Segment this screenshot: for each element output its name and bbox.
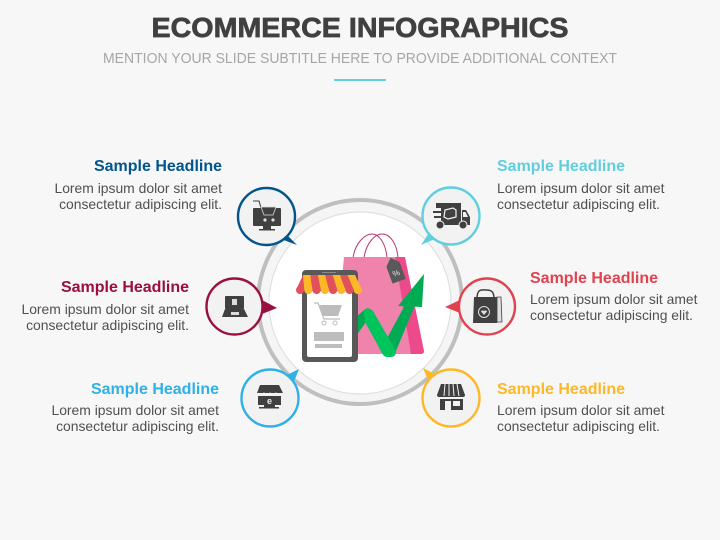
headline: Sample Headline: [497, 158, 625, 175]
text block: Lorem ipsum dolor sit amet: [530, 291, 698, 307]
headline: Sample Headline: [91, 381, 219, 398]
awning: [296, 275, 362, 294]
icon: cart on monitor: [253, 201, 281, 230]
badge: navy: [238, 188, 297, 245]
text block: Lorem ipsum dolor sit amet: [497, 402, 665, 418]
text block: consectetur adipiscing elit.: [497, 196, 660, 212]
item: delivery truck, top right: [421, 158, 665, 245]
icon: shopping bag: [473, 290, 502, 323]
headline: Sample Headline: [497, 381, 625, 398]
item: cart on monitor, top left: [54, 158, 297, 245]
badge: red: [445, 278, 515, 334]
badge: yellow: [422, 368, 480, 426]
phone cart: [314, 303, 342, 325]
text block: consectetur adipiscing elit.: [497, 418, 660, 434]
headline: Sample Headline: [61, 279, 189, 296]
headline: Sample Headline: [94, 158, 222, 175]
text block: consectetur adipiscing elit.: [530, 307, 693, 323]
item: laptop, middle left: [21, 278, 277, 334]
badge: sky blue: [242, 369, 299, 426]
shopping bag: %: [391, 268, 401, 279]
text block: consectetur adipiscing elit.: [56, 418, 219, 434]
headline: Sample Headline: [530, 270, 658, 287]
central illustration: shopping bag, phone store and growth arrow: [296, 234, 424, 362]
text block: consectetur adipiscing elit.: [59, 196, 222, 212]
subtitle: MENTION YOUR SLIDE SUBTITLE HERE TO PROVIDE ADDITIONAL CONTEXT: [103, 51, 617, 67]
phone: [302, 270, 358, 362]
text block: Lorem ipsum dolor sit amet: [497, 180, 665, 196]
text block: Lorem ipsum dolor sit amet: [51, 402, 219, 418]
text block: Lorem ipsum dolor sit amet: [21, 301, 189, 317]
phone bars: [314, 332, 344, 348]
growth arrow: [356, 274, 424, 357]
item: storefront, bottom right: [422, 368, 665, 434]
icon: delivery truck: [433, 203, 470, 229]
icon: storefront: [437, 384, 465, 410]
central ring: [258, 200, 462, 404]
badge: maroon: [206, 278, 277, 334]
icon: laptop: [222, 296, 248, 317]
text block: consectetur adipiscing elit.: [26, 317, 189, 333]
text block: Lorem ipsum dolor sit amet: [54, 180, 222, 196]
icon: online store: [257, 385, 283, 408]
icon: online store: e: [267, 396, 272, 406]
item: online store, bottom left: [51, 369, 299, 434]
title: ECOMMERCE INFOGRAPHICS: [152, 12, 568, 43]
item: shopping bag, middle right: [445, 270, 698, 334]
badge: cyan: [421, 188, 480, 245]
